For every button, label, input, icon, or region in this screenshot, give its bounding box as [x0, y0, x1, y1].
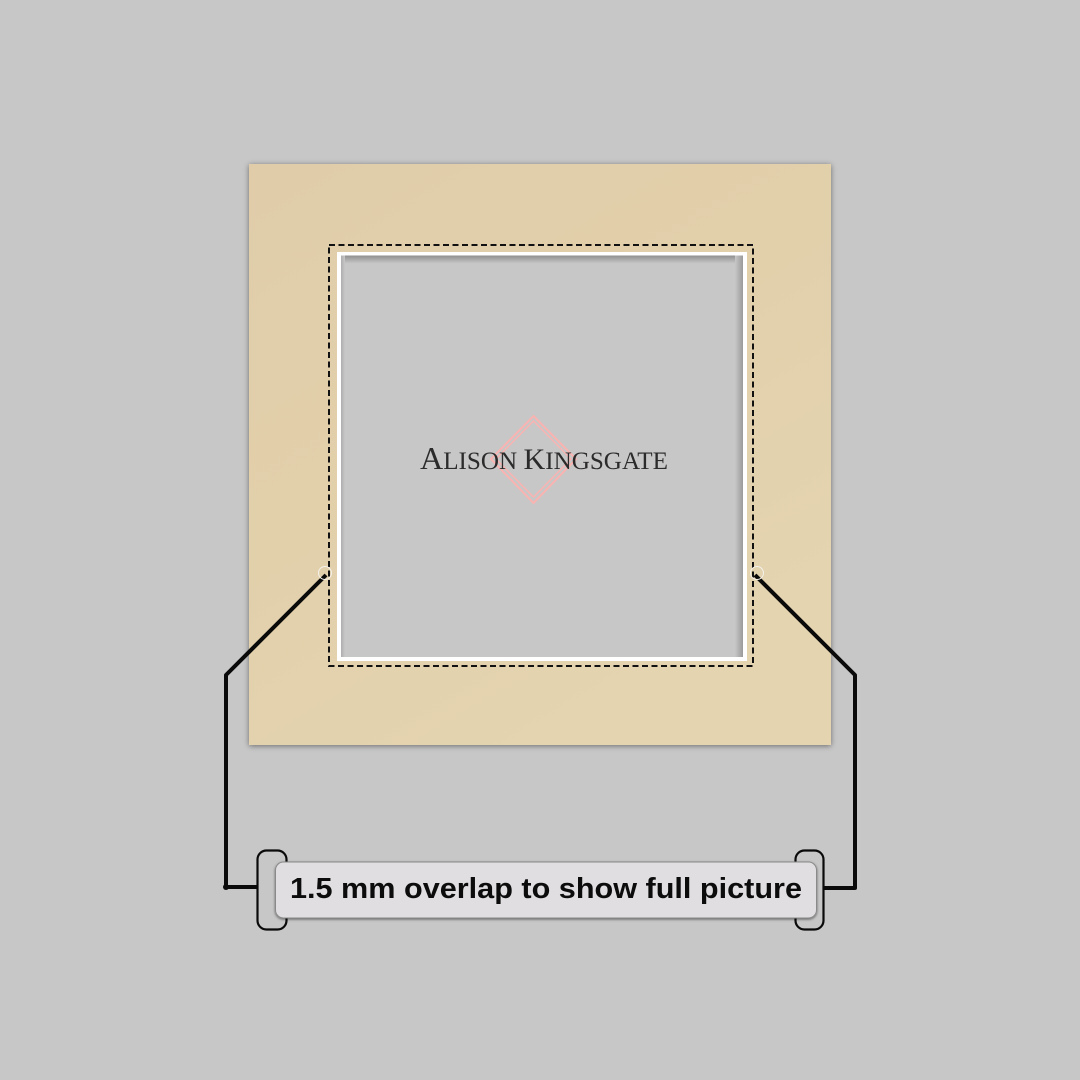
logo diamond [491, 416, 576, 503]
picture window aperture [337, 252, 747, 661]
caption text: 1.5 mm overlap to show full picture [290, 873, 802, 905]
right callout arrow [750, 566, 855, 888]
logo: Alison Kingsgate [420, 416, 668, 503]
label bracket right [796, 850, 824, 930]
mount board panel [249, 164, 831, 745]
logo wordmark: ALISON KINGSGATE [420, 440, 668, 476]
label bracket left [258, 850, 286, 930]
label pill with caption [276, 862, 816, 918]
dashed overlap line [329, 245, 753, 666]
left callout arrow [223, 566, 332, 890]
